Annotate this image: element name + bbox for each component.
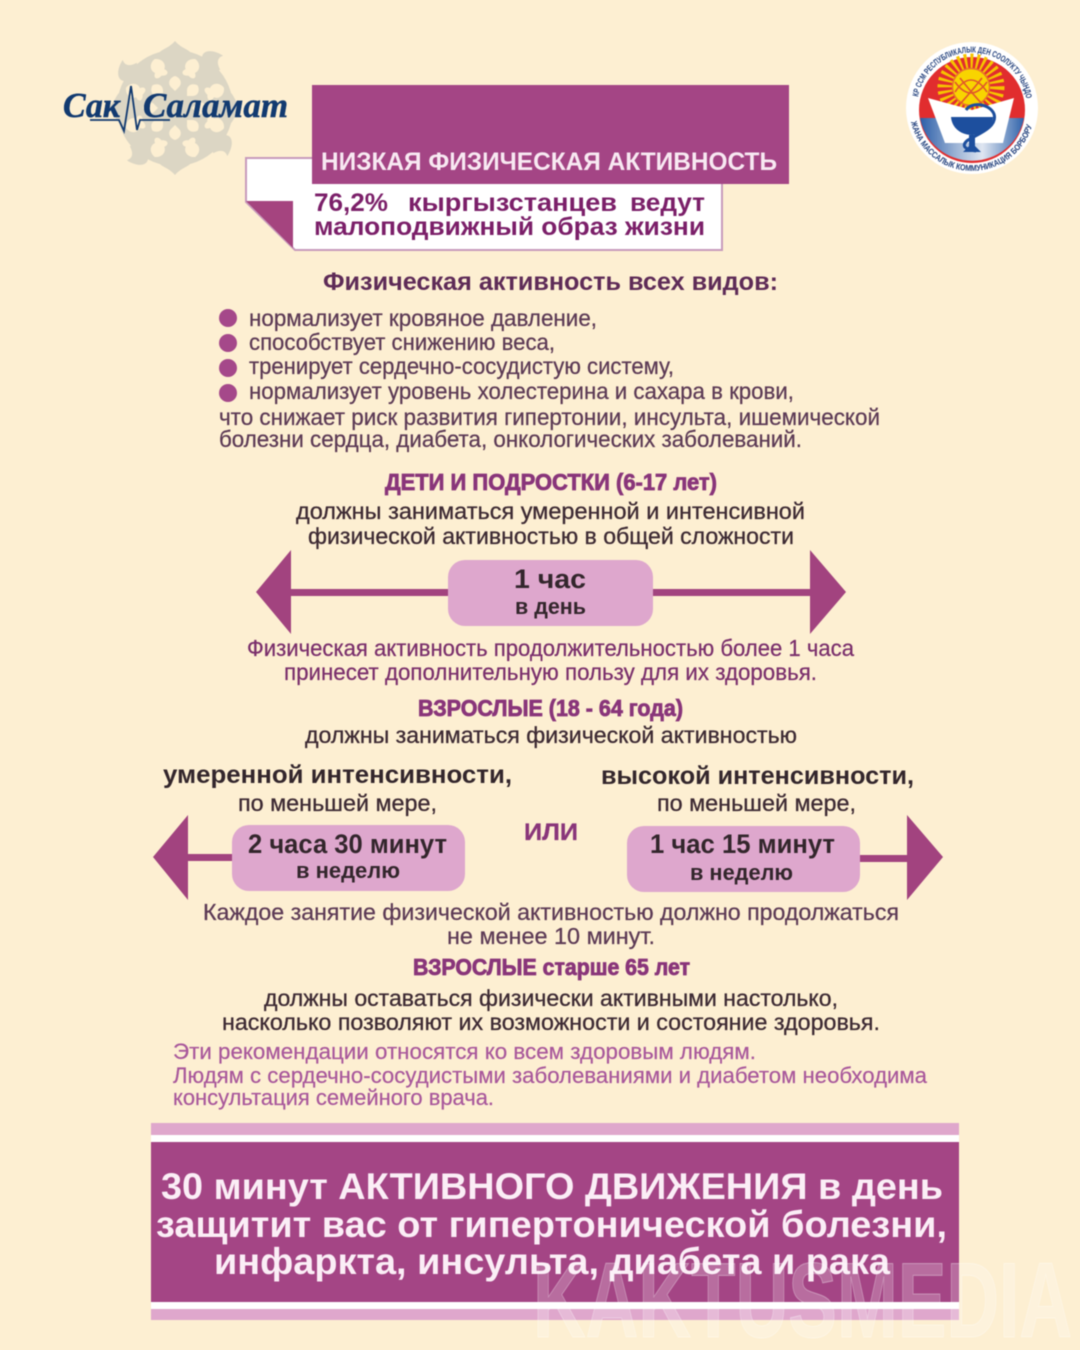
bullets — [219, 309, 237, 402]
time box: 1 h 15 min: в неделю — [690, 860, 793, 885]
icon: blue band — [920, 118, 1024, 161]
banner text: защитит вас от гипертонической болезни, — [156, 1204, 947, 1245]
benefits text — [219, 305, 880, 452]
bottom banner — [151, 1123, 959, 1320]
moderate intensity column — [153, 761, 512, 900]
text — [296, 498, 805, 549]
moderate intensity column: по меньшей мере, — [238, 790, 437, 816]
time box: 2 h 30 min — [232, 825, 465, 891]
heading: ВЗРОСЛЫЕ старше 65 лет — [413, 954, 690, 980]
note: принесет дополнительную пользу для их здоровья. — [284, 659, 817, 685]
text — [222, 985, 880, 1035]
title bar — [312, 85, 789, 184]
subtitle: ведут — [630, 189, 705, 217]
benefits text: нормализует уровень холестерина и сахара в крови, — [249, 378, 794, 404]
or: ИЛИ — [524, 819, 578, 846]
arrow: right — [860, 815, 943, 900]
high intensity column: по меньшей мере, — [657, 790, 856, 816]
time box: 2 h 30 min: в неделю — [296, 858, 400, 883]
emblem text — [910, 46, 1032, 172]
text: должны оставаться физически активными настолько, — [264, 985, 838, 1011]
section: children and teenagers — [247, 469, 854, 685]
icon: ribbon fold — [246, 201, 293, 248]
text: должны заниматься умеренной и интенсивной — [296, 498, 805, 524]
banner text — [156, 1166, 947, 1282]
high intensity column: высокой интенсивности, — [601, 762, 914, 790]
subtitle: малоподвижный образ жизни — [314, 213, 705, 241]
high intensity column — [601, 762, 943, 900]
note: Физическая активность продолжительностью более 1 часа — [247, 635, 854, 661]
arrow: left — [153, 815, 232, 900]
heading: physical activity of all kinds: Физическая активность всех видов: — [323, 268, 778, 296]
time box: 1 h 15 min — [627, 826, 860, 892]
text: должны заниматься физической активностью — [305, 722, 797, 748]
recommendation note: Людям с сердечно-сосудистыми заболеваниями и диабетом необходима — [173, 1063, 928, 1088]
heading: ДЕТИ И ПОДРОСТКИ (6-17 лет) — [385, 469, 717, 495]
subtitle: кыргызстанцев — [408, 189, 617, 217]
note — [203, 899, 899, 949]
note — [247, 635, 854, 685]
subtitle — [314, 189, 705, 241]
benefits text: тренирует сердечно-сосудистую систему, — [249, 353, 674, 379]
logo wordmark — [63, 86, 288, 131]
arrow: two-way — [256, 550, 846, 634]
text: физической активностью в общей сложности — [308, 523, 794, 549]
recommendation note: Эти рекомендации относятся ко всем здоровым людям. — [173, 1039, 756, 1064]
emblem: health promotion centre — [906, 42, 1038, 174]
benefits text: способствует снижению веса, — [249, 329, 555, 355]
icon: sun disk — [952, 68, 990, 106]
icon: bowl of Hygieia — [951, 105, 995, 152]
recommendation note — [173, 1039, 928, 1110]
subtitle: 76,2% — [314, 189, 388, 217]
banner text: 30 минут АКТИВНОГО ДВИЖЕНИЯ в день — [161, 1166, 943, 1207]
benefits text: болезни сердца, диабета, онкологических заболеваний. — [219, 426, 802, 452]
note: Каждое занятие физической активностью должно продолжаться — [203, 899, 899, 925]
banner text: инфаркта, инсульта, диабета и рака — [214, 1241, 890, 1282]
time box: 1 hour: в день — [515, 594, 586, 619]
icon: sun rays — [945, 61, 997, 113]
section: adults — [153, 695, 943, 949]
benefits text: что снижает риск развития гипертонии, инсульта, ишемической — [219, 404, 880, 430]
title panel — [246, 85, 789, 250]
title: НИЗКАЯ ФИЗИЧЕСКАЯ АКТИВНОСТЬ — [321, 148, 777, 176]
benefits text: нормализует кровяное давление, — [249, 305, 597, 331]
recommendation note: консультация семейного врача. — [173, 1085, 494, 1110]
time box: 2 h 30 min: 2 часа 30 минут — [248, 829, 447, 859]
time box: 1 h 15 min: 1 час 15 минут — [650, 829, 835, 859]
time box: 1 hour — [448, 560, 653, 626]
heading: ВЗРОСЛЫЕ (18 - 64 года) — [418, 695, 683, 721]
icon: ornament rosette — [108, 41, 242, 175]
icon: open book — [928, 98, 1014, 143]
note: не менее 10 минут. — [447, 923, 655, 949]
logo wordmark: Сак — [63, 86, 121, 125]
emblem text: ЖАНА МАССАЛЫК КОММУНИКАЦИЯ БОРБОРУ — [910, 120, 1032, 172]
logo wordmark: Саламат — [143, 86, 288, 125]
section: adults over 65 — [222, 954, 880, 1035]
logo: Сак Саламат — [63, 41, 288, 175]
benefits list — [219, 305, 880, 452]
subtitle ribbon — [246, 158, 722, 250]
time box: 1 hour: 1 час — [514, 564, 586, 594]
moderate intensity column: умеренной интенсивности, — [163, 761, 512, 789]
text: насколько позволяют их возможности и состояние здоровья. — [222, 1009, 880, 1035]
